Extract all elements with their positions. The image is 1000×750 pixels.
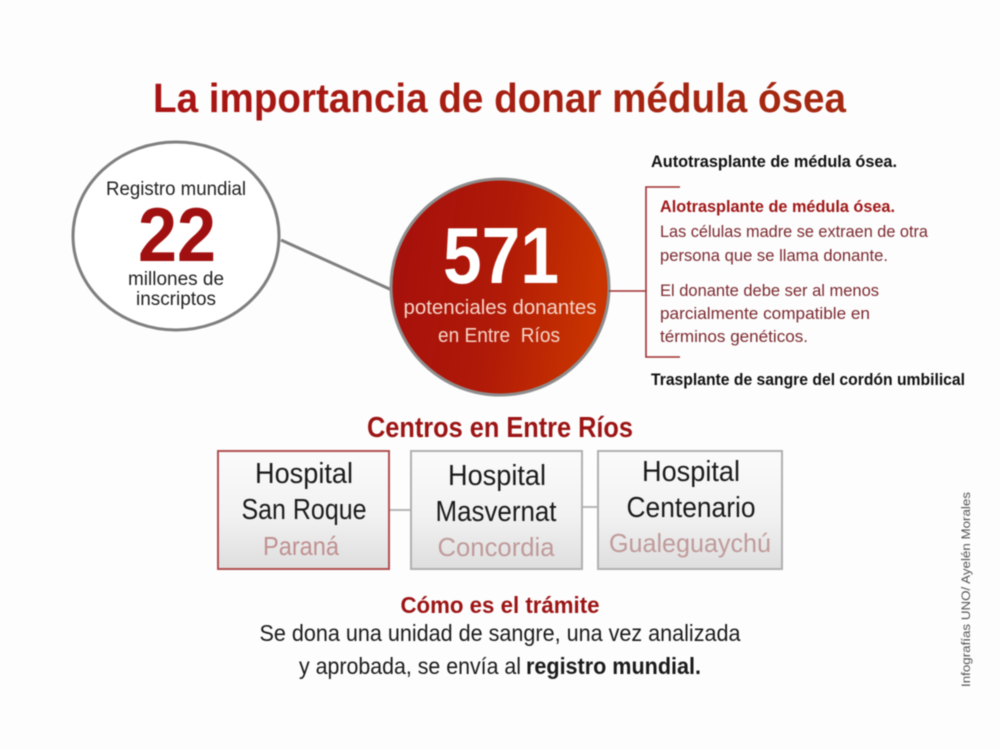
panel: donors circle xyxy=(391,179,609,395)
panel: Hospital Centenario: Gualeguaychú xyxy=(609,528,771,558)
box connectors xyxy=(390,507,598,510)
text block: alotrasplante xyxy=(660,197,929,346)
panel: Hospital San Roque: San Roque xyxy=(242,494,366,526)
bracket connector xyxy=(609,187,680,357)
panel: Hospital Centenario xyxy=(598,451,782,569)
heading: autotrasplante: Autotrasplante de médula ósea. xyxy=(651,152,897,171)
panel: Hospital Masvernat xyxy=(411,451,582,569)
donors caption: potenciales donantes xyxy=(404,297,596,319)
heading: tramite: Cómo es el trámite xyxy=(400,592,600,618)
text block: alotrasplante: términos genéticos. xyxy=(660,327,808,346)
panel: Hospital Centenario: Hospital xyxy=(642,456,740,488)
text block: alotrasplante: Las células madre se extraen de otra xyxy=(660,222,929,241)
text block: tramite xyxy=(260,620,741,679)
donors number: 571 xyxy=(443,211,559,300)
panel: Hospital Centenario: Centenario xyxy=(626,492,756,524)
panel: Hospital Masvernat: Hospital xyxy=(448,460,546,492)
panel: Hospital Masvernat: Concordia xyxy=(438,532,555,562)
registry caption: millones de xyxy=(128,269,224,290)
connector line between circles xyxy=(281,240,394,291)
text block: alotrasplante: Alotrasplante de médula ósea. xyxy=(660,197,895,216)
text block: tramite: y aprobada, se envía al xyxy=(299,653,521,679)
heading: cordon umbilical: Trasplante de sangre del cordón umbilical xyxy=(651,370,965,389)
registry number: 22 xyxy=(138,193,216,278)
text block: alotrasplante: persona que se llama donante. xyxy=(660,246,888,265)
panel: world registry circle: inscriptos xyxy=(136,289,216,310)
heading: centros: Centros en Entre Ríos xyxy=(367,412,633,444)
panel: Hospital San Roque xyxy=(218,451,389,569)
panel: Hospital San Roque: Hospital xyxy=(255,458,353,490)
text block: tramite: registro mundial. xyxy=(526,653,701,679)
panel: Hospital San Roque: Paraná xyxy=(263,531,339,561)
text block: alotrasplante: parcialmente compatible en xyxy=(660,304,870,323)
panel: Hospital Masvernat: Masvernat xyxy=(436,496,556,528)
registry label: Registro mundial xyxy=(106,179,246,200)
panel: donors circle: en Entre Ríos xyxy=(438,325,560,347)
text block: alotrasplante: El donante debe ser al menos xyxy=(660,281,879,300)
panel: world registry circle xyxy=(73,142,279,330)
credit: Infografías UNO/ Ayelén Morales xyxy=(961,492,973,687)
text block: tramite: Se dona una unidad de sangre, una vez analizada xyxy=(260,620,741,646)
title: La importancia de donar médula ósea xyxy=(153,75,847,121)
